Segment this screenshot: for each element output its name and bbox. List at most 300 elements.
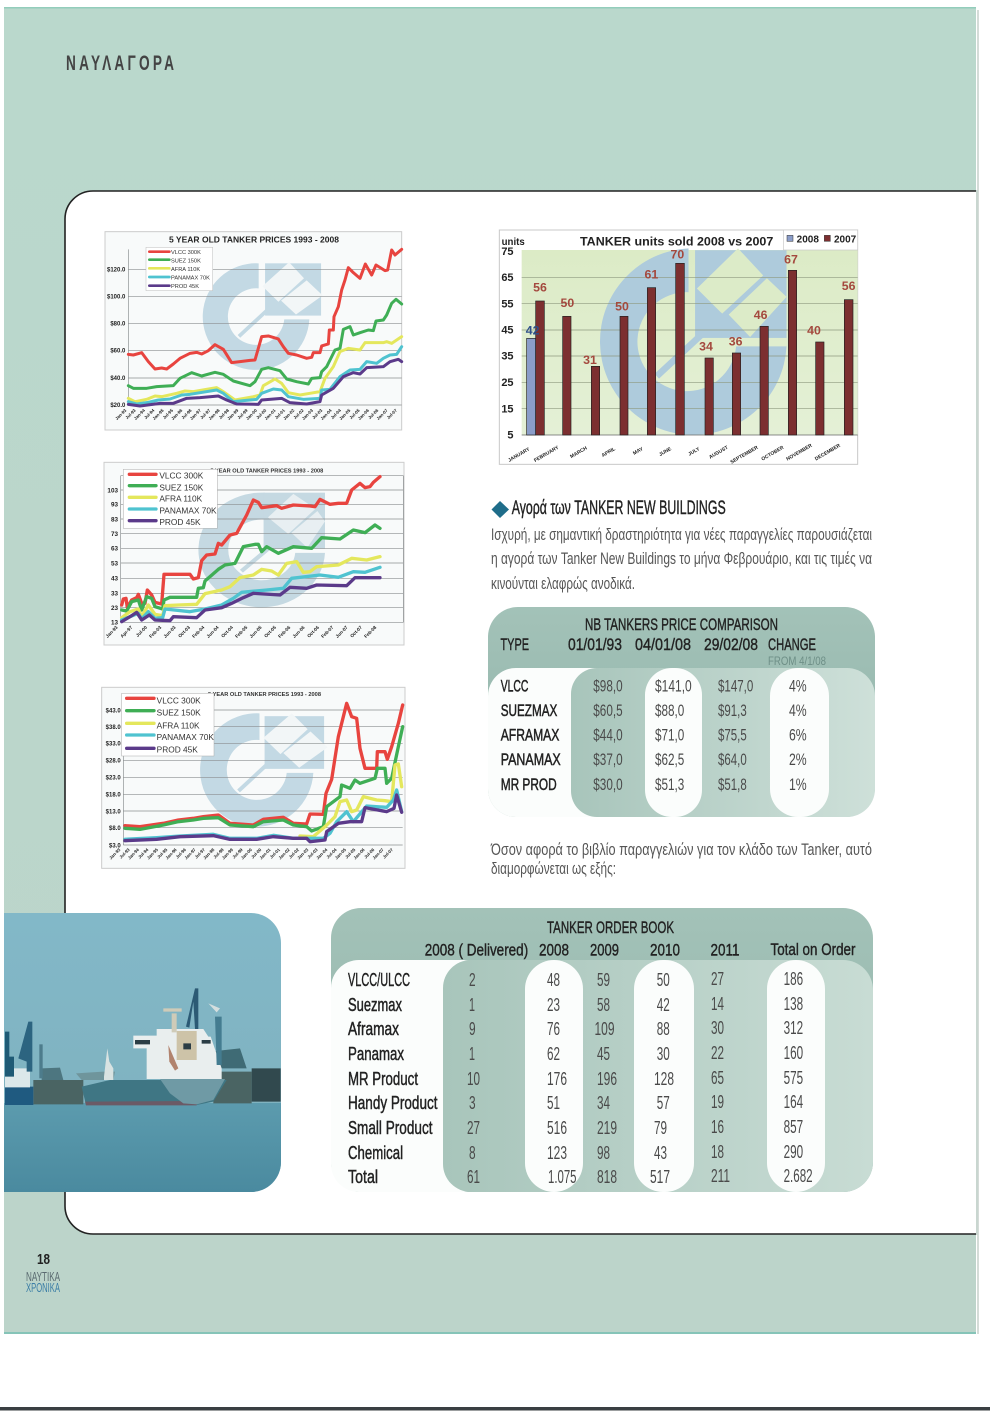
table header: 2010: [650, 940, 680, 960]
y axis labels: 103: [107, 487, 118, 494]
y axis labels: 93: [111, 502, 118, 509]
table header: Total on Order: [770, 940, 856, 959]
legend: SUEZ 150K: [171, 258, 201, 264]
table values: 6%: [789, 726, 807, 744]
chart title: 5 YEAR OLD TANKER PRICES 1993 - 2008: [169, 235, 339, 245]
chart title: 5 YEAR OLD TANKER PRICES 1993 - 2008: [208, 692, 321, 698]
table header: 01/01/93: [568, 635, 622, 654]
row labels: Suezmax: [348, 995, 402, 1015]
table values: 176: [547, 1069, 567, 1089]
page number and magazine name: ΧΡΟΝΙΚΑ: [26, 1280, 60, 1295]
y axis labels: 5: [507, 430, 513, 442]
table values: 18: [711, 1142, 724, 1162]
table values: 34: [597, 1093, 610, 1113]
month labels: JANUARY: [507, 446, 532, 464]
bar chart: tanker units sold 2008 vs 2007: [499, 230, 858, 466]
x axis labels: Jul-96: [175, 847, 187, 860]
table title: TANKER ORDER BOOK: [547, 918, 674, 937]
chart: 10 year old tanker prices: [104, 462, 404, 645]
row labels: VLCC: [501, 676, 528, 696]
legend: [783, 230, 858, 250]
row labels: Total: [348, 1167, 378, 1187]
x axis labels: Jul-07: [386, 407, 398, 420]
x axis labels: Jan-04: [319, 407, 333, 421]
month labels: JUNE: [658, 446, 673, 458]
x axis labels: Jul-01: [269, 847, 281, 860]
y axis labels: $100.0: [107, 294, 126, 300]
table values: [467, 969, 813, 1187]
table values: 65: [711, 1068, 724, 1088]
x axis labels: Jul-04: [325, 847, 338, 860]
chart: 5 year old tanker prices: [105, 232, 402, 430]
legend: AFRA 110K: [157, 720, 200, 730]
y axis labels: 83: [111, 516, 118, 523]
y axis labels: [107, 487, 118, 627]
x axis labels: Feb-05: [234, 625, 249, 639]
x axis labels: Jul-97: [199, 407, 212, 420]
x axis labels: Jun-03: [163, 625, 177, 639]
table values: 1%: [789, 775, 807, 794]
y axis labels: $20.0: [110, 403, 126, 409]
legend: 2008: [797, 234, 819, 245]
logo watermark: [200, 713, 327, 827]
x axis labels: Jul-94: [137, 847, 150, 860]
chart header: TANKER units sold 2008 vs 2007: [580, 234, 774, 248]
x axis labels: Jul-00: [255, 407, 268, 420]
x axis labels: Jul-93: [124, 407, 137, 420]
legend: PROD 45K: [171, 284, 199, 290]
y axis labels: $60.0: [110, 349, 126, 355]
table values: 76: [547, 1019, 560, 1039]
x axis labels: Jan-05: [338, 407, 352, 421]
y axis labels: $38.0: [106, 725, 121, 731]
x axis labels: Jul-02: [288, 847, 300, 860]
row labels: MR PROD: [501, 775, 557, 794]
x axis labels: Jul-99: [236, 407, 249, 420]
table values: $147,0: [718, 676, 753, 696]
table values: 123: [547, 1143, 567, 1163]
table values: 2.682: [784, 1166, 813, 1186]
row labels: AFRAMAX: [501, 726, 559, 744]
page number and magazine name: [26, 1251, 60, 1295]
table values: 818: [597, 1167, 617, 1187]
y axis labels: $33.0: [106, 742, 121, 748]
table values: $51,3: [655, 775, 684, 794]
table title: NB TANKERS PRICE COMPARISON: [585, 615, 778, 634]
table header: CHANGE: [768, 635, 816, 654]
legend: VLCC 300K: [157, 695, 201, 705]
month labels: [507, 443, 842, 466]
x axis labels: Jan-96: [164, 847, 178, 860]
x axis labels: Jul-00: [250, 847, 263, 860]
x axis labels: Jul-96: [180, 407, 193, 420]
x axis labels: Oct-05: [263, 625, 277, 639]
legend: PROD 45K: [159, 517, 201, 527]
x axis labels: Jul-06: [363, 847, 376, 860]
x axis labels: Feb-04: [191, 625, 206, 639]
legend: [146, 247, 213, 291]
y axis labels: 13: [111, 620, 118, 627]
legend: PROD 45K: [157, 745, 198, 755]
x axis labels: Jul-98: [212, 847, 225, 860]
y axis labels: 55: [501, 298, 514, 310]
table values: $98,0: [593, 676, 623, 696]
table values: $141,0: [655, 676, 692, 696]
y axis labels: 45: [501, 325, 514, 337]
table values: 196: [597, 1069, 617, 1089]
table values: 8: [469, 1143, 476, 1163]
row labels: Handy Product: [348, 1093, 438, 1113]
table values: 23: [547, 995, 560, 1015]
x axis labels: Jan-95: [146, 847, 159, 860]
month labels: FEBRUARY: [533, 445, 561, 464]
table values: 10: [467, 1069, 480, 1089]
month labels: NOVEMBER: [785, 443, 814, 462]
y axis labels: $8.0: [109, 826, 121, 832]
x axis labels: Oct-07: [349, 625, 363, 639]
order book intro paragraph: διαμορφώνεται ως εξής:: [491, 859, 616, 878]
legend: PANAMAX 70K: [159, 506, 217, 516]
month labels: SEPTEMBER: [729, 445, 760, 466]
table values: $91,3: [718, 701, 747, 720]
bar value labels: 36: [729, 335, 743, 349]
x axis labels: Jan-07: [375, 407, 389, 421]
month labels: APRIL: [601, 446, 617, 459]
x axis labels: Jan-02: [282, 407, 296, 421]
y axis labels: 35: [501, 351, 514, 363]
y axis labels: $23.0: [106, 776, 121, 782]
x axis labels: Jul-03: [306, 847, 319, 860]
legend: AFRA 110K: [171, 267, 200, 273]
legend: PANAMAX 70K: [171, 275, 210, 281]
y axis labels: 73: [111, 531, 118, 538]
x axis labels: Jul-06: [367, 407, 380, 420]
x axis labels: Jun-05: [249, 625, 263, 639]
table values: 1: [469, 1044, 475, 1064]
month labels: MARCH: [569, 445, 589, 460]
table values: 517: [650, 1167, 670, 1187]
table values: 61: [467, 1167, 480, 1187]
x axis labels: Jan-00: [240, 847, 253, 860]
x axis labels: [114, 407, 398, 421]
photo: tanker ship at pier: [4, 913, 281, 1192]
body paragraph: κινούνται ελαφρώς ανοδικά.: [491, 574, 635, 593]
row labels: SUEZMAX: [501, 701, 557, 720]
x axis labels: Jan-03: [296, 847, 310, 860]
legend: [122, 693, 214, 756]
table values: 160: [784, 1043, 803, 1063]
x axis labels: Oct-03: [177, 625, 191, 639]
table values: 22: [711, 1043, 724, 1063]
y axis labels: $28.0: [106, 759, 121, 765]
row labels: Aframax: [348, 1019, 399, 1039]
legend: [123, 469, 217, 528]
y axis labels: $120.0: [107, 267, 126, 273]
order book intro paragraph: [490, 840, 872, 878]
bar value labels: 56: [842, 279, 856, 293]
row labels: Small Product: [348, 1118, 432, 1138]
x axis labels: Jan-99: [221, 847, 234, 860]
table header: 04/01/08: [635, 635, 691, 654]
row labels: [501, 676, 561, 794]
y axis labels: $18.0: [106, 793, 121, 799]
x axis labels: Jan-98: [202, 847, 216, 860]
table values: 27: [467, 1118, 480, 1138]
x axis labels: Jul-98: [218, 407, 230, 420]
table values: $88,0: [655, 701, 684, 720]
legend: AFRA 110K: [159, 494, 203, 504]
table values: 109: [594, 1019, 614, 1039]
x axis labels: Jul-01: [274, 407, 286, 420]
table header: [500, 635, 816, 654]
x axis labels: [108, 847, 394, 860]
x axis labels: Jan-94: [127, 847, 140, 860]
x axis labels: Jul-94: [143, 407, 156, 420]
table values: 45: [597, 1044, 610, 1064]
table values: 312: [784, 1018, 803, 1038]
table values: 857: [784, 1117, 803, 1137]
table values: 27: [711, 969, 724, 989]
table values: 290: [784, 1142, 803, 1162]
table values: $60,5: [593, 701, 623, 720]
row labels: MR Product: [348, 1069, 418, 1089]
logo watermark: [203, 262, 323, 370]
table values: 16: [711, 1117, 724, 1137]
legend: 2007: [834, 234, 857, 245]
y axis labels: 75: [501, 246, 514, 258]
page number and magazine name: ΝΑΥΤΙΚΑ: [26, 1269, 60, 1284]
row labels: [348, 970, 438, 1187]
y axis labels: $13.0: [106, 809, 121, 815]
x axis labels: Jul-95: [156, 847, 169, 860]
x axis labels: Jul-03: [311, 407, 324, 420]
x axis labels: Feb-07: [320, 625, 335, 639]
row labels: Chemical: [348, 1143, 403, 1163]
x axis labels: Jul-05: [344, 847, 357, 860]
row labels: VLCC/ULCC: [348, 970, 410, 990]
table values: $30,0: [593, 775, 623, 794]
table values: 30: [711, 1018, 724, 1038]
x axis labels: Jul-95: [162, 407, 174, 420]
bar value labels: 31: [583, 353, 597, 367]
x axis labels: Oct-04: [220, 625, 234, 639]
table values: 3: [469, 1093, 476, 1113]
table values: 219: [597, 1118, 617, 1138]
month labels: OCTOBER: [760, 445, 785, 462]
x axis labels: Jul-02: [292, 407, 305, 420]
white content panel: [65, 191, 977, 1234]
bar value labels: 46: [754, 308, 768, 322]
x axis labels: Jan-93: [114, 407, 128, 421]
table values: $62,5: [655, 750, 684, 769]
x axis labels: Jan-97: [183, 847, 197, 860]
x axis labels: Jul-99: [231, 847, 244, 860]
table values: 98: [597, 1143, 610, 1163]
table values: 211: [711, 1166, 730, 1186]
y axis labels: $43.0: [106, 708, 121, 714]
body paragraph: [491, 525, 872, 593]
order book intro paragraph: Όσον αφορά το βιβλίο παραγγελιών για τον κλάδο των Tanker, αυτό: [490, 840, 872, 859]
page number and magazine name: 18: [37, 1251, 50, 1268]
x axis labels: Jan-06: [352, 847, 366, 860]
y axis labels: 53: [111, 560, 118, 567]
x axis labels: Jan-96: [170, 407, 184, 421]
x axis labels: Apr-97: [119, 625, 134, 639]
y axis labels: $3.0: [109, 843, 121, 849]
section heading: Αγορά των TANKER NEW BUILDINGS: [512, 498, 726, 519]
table values: 42: [657, 995, 670, 1015]
month labels: AUGUST: [708, 445, 729, 461]
table values: 48: [547, 970, 560, 990]
table values: $64,0: [718, 750, 747, 769]
y axis labels: 63: [111, 546, 118, 553]
x axis labels: Jan-03: [301, 407, 314, 421]
table values: 9: [469, 1019, 476, 1039]
table values: 79: [654, 1118, 667, 1138]
x axis labels: Jan-93: [105, 625, 119, 639]
table header: [425, 940, 856, 960]
x axis labels: Jan-00: [245, 407, 258, 421]
table header: 2009: [590, 940, 619, 960]
chart header: units: [502, 237, 525, 248]
x axis labels: Jul-93: [118, 847, 131, 860]
legend: SUEZ 150K: [157, 708, 201, 718]
chart title: 5 YEAR OLD TANKER PRICES 1993 - 2008: [210, 468, 323, 474]
y axis labels: [106, 708, 121, 849]
x axis labels: Jan-07: [371, 847, 385, 860]
x axis labels: Jan-04: [315, 847, 329, 860]
table values: 59: [597, 970, 610, 990]
bar value labels: 50: [560, 296, 574, 310]
logo watermark: [198, 493, 325, 607]
x axis labels: Jan-94: [133, 407, 146, 421]
table header: 2008: [539, 940, 569, 960]
table values: 128: [654, 1069, 674, 1089]
x axis labels: Jan-99: [226, 407, 240, 421]
table values: 1.075: [548, 1167, 576, 1187]
table values: $71,0: [655, 726, 684, 744]
y axis labels: 15: [501, 403, 514, 415]
month labels: MAY: [632, 446, 645, 457]
y axis labels: 65: [501, 272, 514, 284]
x axis labels: Jan-05: [334, 847, 347, 860]
table values: [593, 676, 807, 794]
line series: [125, 703, 403, 842]
table values: 88: [657, 1019, 670, 1039]
table values: 1: [469, 995, 475, 1015]
table values: 51: [547, 1093, 560, 1113]
bar value labels: 40: [807, 323, 821, 337]
table values: 57: [657, 1093, 670, 1113]
x axis labels: Jan-98: [207, 407, 221, 421]
y axis labels: [501, 246, 514, 442]
x axis labels: Jul-04: [330, 407, 342, 420]
bars: [527, 263, 853, 435]
panel right edge: [976, 190, 978, 1235]
table values: $75,5: [718, 726, 747, 744]
legend: VLCC 300K: [159, 471, 204, 481]
table values: 50: [657, 970, 670, 990]
bar value labels: 34: [699, 340, 713, 354]
x axis labels: Feb-08: [363, 625, 378, 639]
y axis labels: $80.0: [110, 322, 126, 328]
table values: 14: [711, 994, 724, 1014]
line series: [128, 249, 402, 406]
table values: 516: [547, 1118, 567, 1138]
logo watermark: [600, 248, 787, 435]
table: NB tankers price comparison: [488, 607, 875, 817]
bar value labels: 42: [526, 323, 540, 337]
x axis labels: Jan-06: [357, 407, 370, 421]
title: ΝΑΥΛΑΓΟΡΑ: [66, 51, 177, 75]
bar value labels: 70: [670, 247, 684, 261]
x axis labels: Jan-01: [258, 847, 272, 860]
x axis labels: Jan-95: [151, 407, 165, 421]
x axis labels: Feb-06: [277, 625, 292, 639]
table values: 30: [657, 1044, 670, 1064]
bar value labels: 50: [615, 300, 629, 314]
legend: VLCC 300K: [171, 250, 201, 256]
bar value labels: [526, 247, 856, 367]
row labels: PANAMAX: [501, 750, 561, 769]
bar value labels: 67: [784, 253, 798, 267]
chart header: [502, 234, 774, 248]
table header: 2011: [710, 940, 740, 960]
table values: $44,0: [593, 726, 623, 744]
month labels: JULY: [687, 446, 702, 458]
section text: tanker new buildings: [491, 498, 872, 593]
table values: 138: [784, 994, 803, 1014]
x axis labels: Jan-93: [108, 847, 122, 860]
x axis labels: Jan-02: [277, 847, 291, 860]
y axis labels: 23: [111, 605, 118, 612]
table values: 575: [784, 1068, 803, 1088]
x axis labels: Jun-06: [292, 625, 306, 639]
x axis labels: Jun-04: [206, 625, 220, 639]
table values: 164: [784, 1092, 803, 1112]
table values: 19: [711, 1092, 724, 1112]
y axis labels: 43: [111, 576, 118, 583]
table values: 4%: [789, 676, 807, 696]
table values: 43: [654, 1143, 667, 1163]
table values: 62: [547, 1044, 560, 1064]
bar value labels: 61: [644, 267, 658, 281]
table header: TYPE: [500, 635, 529, 654]
x axis labels: Jul-07: [382, 847, 394, 860]
table values: $37,0: [593, 750, 623, 769]
table values: 2: [469, 970, 476, 990]
table header: 2008 ( Delivered): [425, 940, 528, 960]
change note: FROM 4/1/08: [768, 654, 826, 668]
x axis labels: Jan-97: [189, 407, 202, 421]
x axis labels: Jan-01: [263, 407, 277, 421]
x axis labels: Jul-05: [348, 407, 361, 420]
x axis labels: [105, 625, 378, 639]
x axis labels: Oct-06: [306, 625, 320, 639]
month labels: DECEMBER: [814, 443, 842, 462]
y axis labels: 25: [501, 377, 514, 389]
table: tanker order book: [331, 908, 873, 1192]
chart: 15 year old tanker prices: [102, 687, 405, 868]
table values: 186: [784, 969, 803, 989]
x axis labels: Feb-03: [148, 625, 163, 639]
bottom edge bar: [0, 1407, 990, 1410]
table values: 2%: [789, 750, 807, 769]
y axis labels: $40.0: [110, 376, 126, 382]
bar value labels: 56: [533, 280, 547, 294]
table values: $51,8: [718, 775, 747, 794]
x axis labels: Jul-00: [135, 625, 148, 638]
